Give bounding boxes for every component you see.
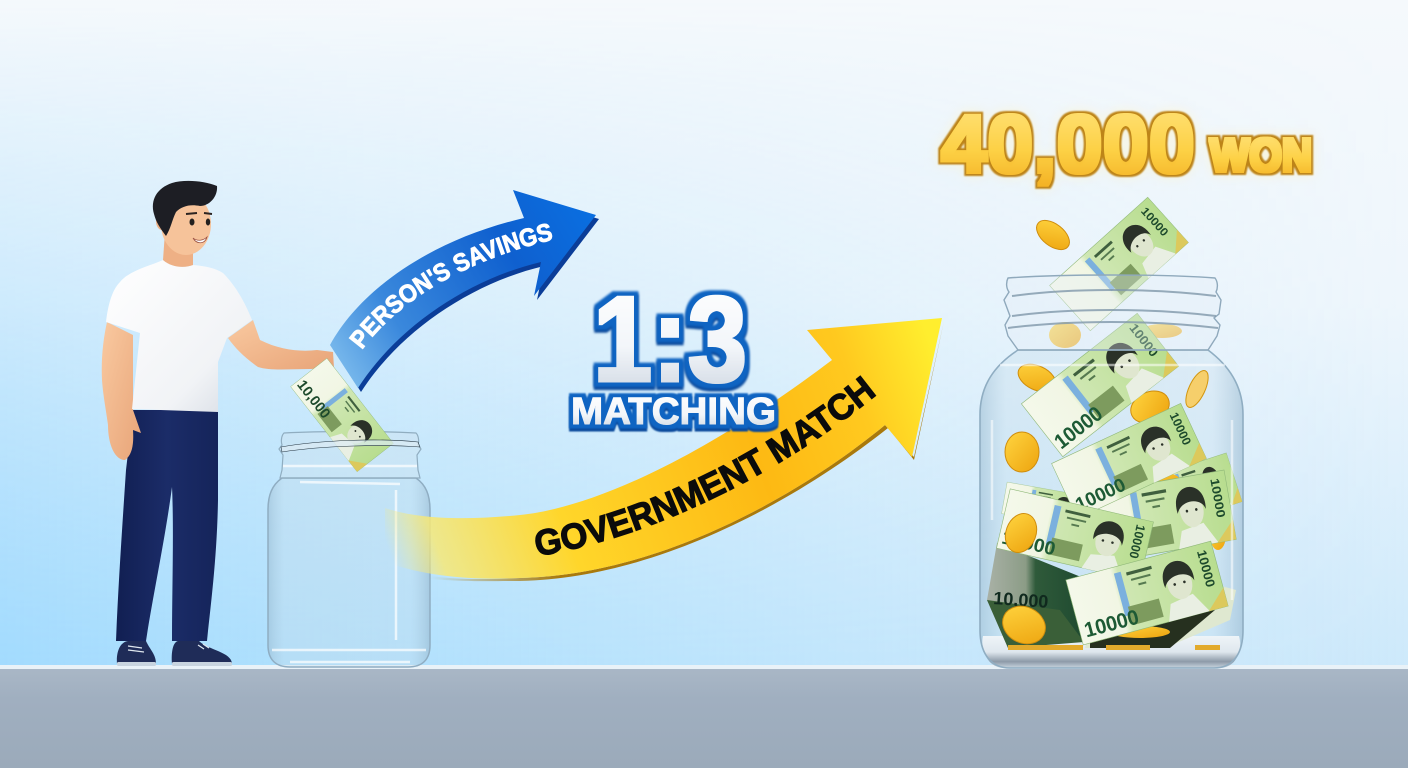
money pile: 10000 [1050, 403, 1107, 454]
bill falling into jar [1050, 197, 1188, 331]
T-shirt [106, 260, 252, 412]
right jar full of bills and coins [980, 197, 1243, 668]
pale background bills [1002, 453, 1242, 648]
jar glass front [980, 350, 1243, 668]
money pile [987, 313, 1236, 651]
person [102, 181, 334, 666]
jar back glass [980, 350, 1243, 668]
bill dropped by person: 10,000 [293, 377, 333, 422]
total amount: 40,000 won: 40,000 [941, 99, 1195, 190]
left arm [102, 322, 141, 460]
jar body [268, 478, 430, 667]
face [153, 181, 217, 255]
trousers [116, 410, 218, 641]
money pile: 10000 [1082, 605, 1141, 642]
jar neck [279, 432, 421, 478]
money pile: 10000 [1000, 528, 1057, 560]
jar lid threads [1004, 275, 1221, 350]
left empty jar [268, 432, 430, 667]
right arm [228, 320, 334, 370]
money pile: 10000 [1126, 321, 1161, 360]
total amount: 40,000 won: WON [1210, 129, 1312, 181]
yellow arrow: government match [385, 318, 944, 582]
blue arrow: person's savings: PERSON'S SAVINGS [348, 224, 552, 350]
blue arrow: person's savings [330, 190, 599, 392]
total amount: 40,000 won [941, 99, 1312, 190]
money pile: 10000 [1208, 477, 1228, 519]
dark folded bill [987, 543, 1084, 648]
neck [163, 232, 193, 267]
shoes [117, 641, 232, 666]
jar rim in front of bill [281, 440, 420, 452]
yellow arrow: government match: GOVERNMENT MATCH [535, 375, 876, 555]
bill falling into jar: 10000 [1138, 204, 1171, 239]
money pile: 10000 [1167, 410, 1194, 447]
jar base [982, 636, 1240, 668]
shelf [0, 665, 1408, 768]
heading: 1:3 matching: MATCHING [571, 391, 776, 433]
money pile: 10000 [1126, 523, 1148, 560]
money pile: 10000 [1194, 548, 1218, 589]
dark folded bill: 10,000 [993, 588, 1049, 612]
flying gold coins [1005, 215, 1226, 550]
bill dropped by person [291, 358, 393, 472]
heading: 1:3 matching: 1:3 [593, 271, 747, 407]
money pile: 10000 [1072, 475, 1129, 516]
